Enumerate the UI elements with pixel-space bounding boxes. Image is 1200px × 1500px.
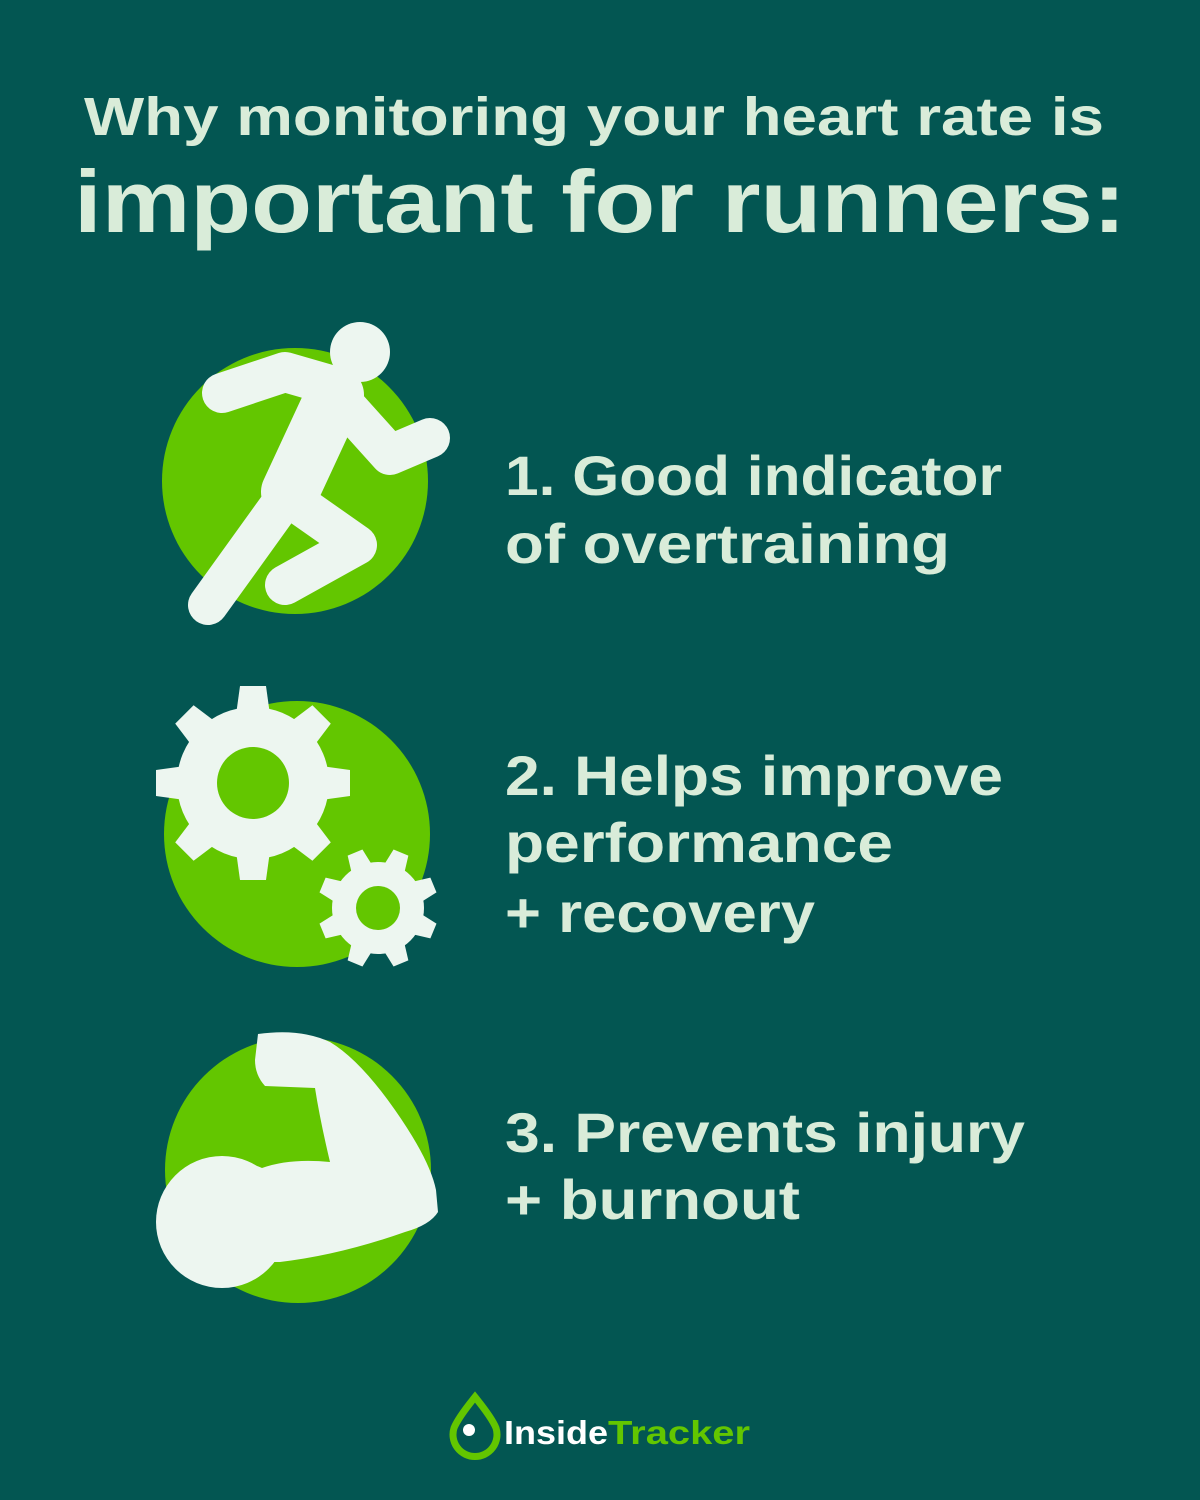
text: item 2: 2. Helps improve xyxy=(505,744,1003,807)
logo: InsideTracker: Tracker xyxy=(608,1414,750,1451)
title: important for runners: xyxy=(74,152,1126,251)
text: item 3: 3. Prevents injury xyxy=(505,1101,1025,1164)
title xyxy=(74,87,1126,251)
text: item 3: + burnout xyxy=(505,1168,800,1231)
title: Why monitoring your heart rate is xyxy=(84,87,1104,147)
text: item 3 xyxy=(505,1101,1025,1231)
logo: InsideTracker xyxy=(453,1397,750,1457)
icon: runner xyxy=(162,322,430,614)
text: item 1: of overtraining xyxy=(505,512,950,575)
icon: flexed arm xyxy=(156,1032,438,1303)
text: item 2: + recovery xyxy=(505,881,815,944)
logo: InsideTracker: Inside xyxy=(504,1414,608,1451)
icon: gears xyxy=(156,686,438,968)
text: item 2 xyxy=(505,744,1003,944)
text: item 2: performance xyxy=(505,811,893,874)
text: item 1 xyxy=(505,444,1002,575)
text: item 1: 1. Good indicator xyxy=(505,444,1002,507)
